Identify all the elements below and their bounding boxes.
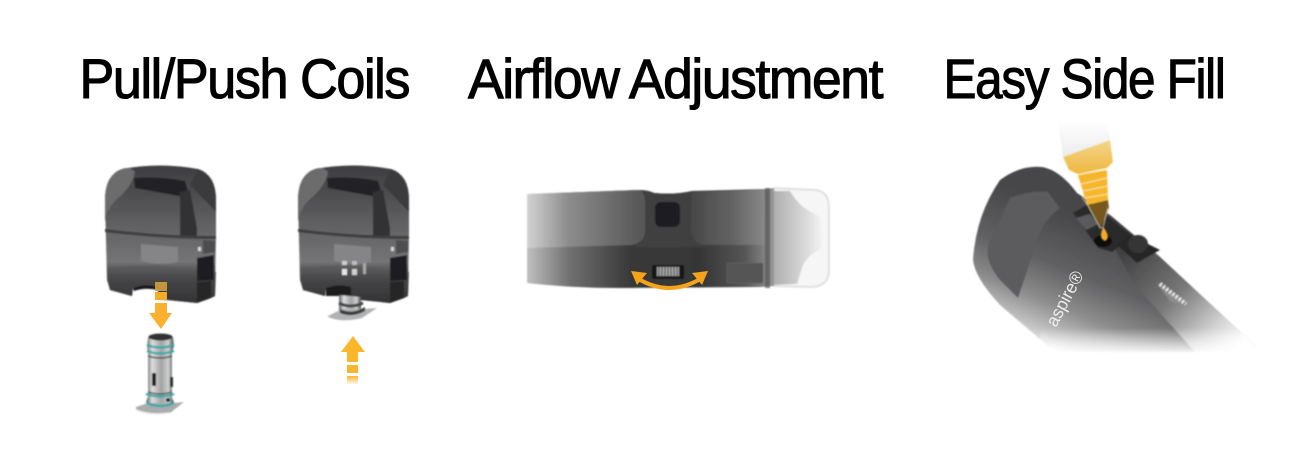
panel: pull/push coils illustration	[105, 166, 409, 414]
device top view	[527, 188, 829, 288]
heading: Airflow Adjustment: Airflow Adjustment	[468, 47, 884, 110]
device with open fill port	[973, 167, 1270, 355]
pod with coil inserted	[298, 166, 409, 320]
panel: airflow adjustment illustration	[527, 188, 829, 288]
pod with coil removed	[105, 166, 216, 303]
heading: Pull/Push Coils: Pull/Push Coils	[80, 47, 409, 110]
arrow: push coil up	[341, 336, 365, 384]
arrow: insert coil down	[149, 282, 172, 329]
e-liquid bottle	[1058, 120, 1113, 241]
coil	[136, 334, 184, 414]
aspire logo: aspire®	[1042, 268, 1088, 330]
panel: easy side fill illustration	[973, 120, 1270, 355]
heading: Easy Side Fill: Easy Side Fill	[944, 47, 1224, 110]
arrow: rotate wheel both ways	[631, 271, 708, 288]
